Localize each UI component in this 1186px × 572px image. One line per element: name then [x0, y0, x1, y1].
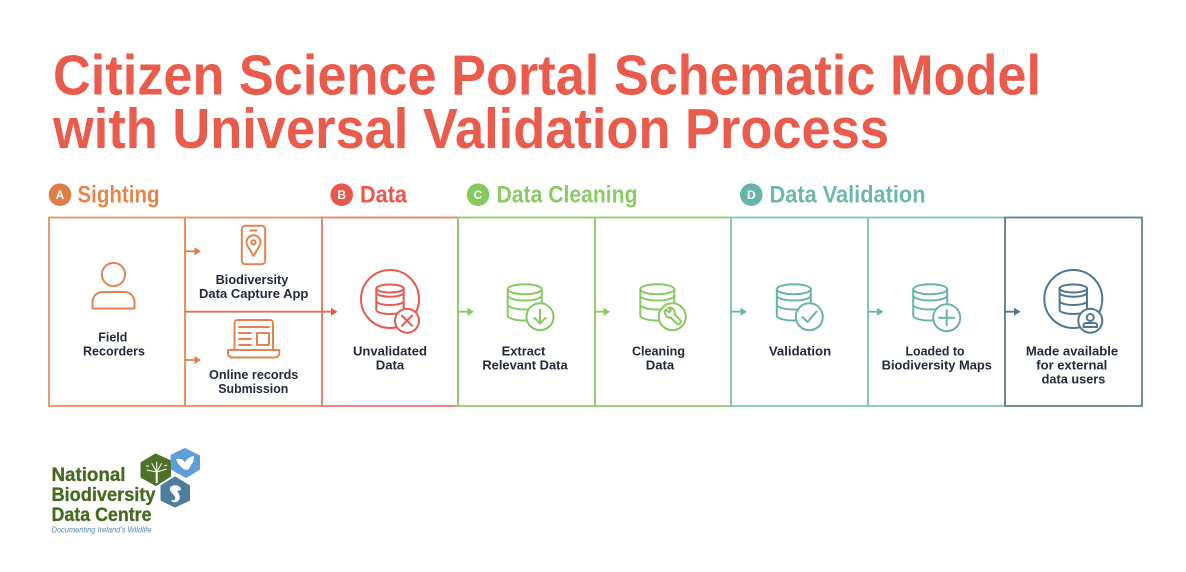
panel: capture routes — [185, 218, 322, 406]
icon: database with check — [777, 284, 823, 330]
panel: cleaning data — [595, 218, 731, 406]
panel: loaded to biodiversity maps — [868, 218, 1005, 406]
logo: National Biodiversity Data Centre — [52, 449, 199, 535]
heading: B Data: B — [337, 188, 346, 202]
logo text: Biodiversity — [52, 484, 156, 506]
text: made available for external data users: Made available — [1026, 344, 1118, 359]
icon: database with cross — [361, 270, 419, 333]
text: online records submission — [209, 367, 298, 396]
heading: B Data: Data — [360, 182, 408, 208]
panel: field recorders — [49, 218, 185, 406]
text: made available for external data users: for external — [1036, 358, 1107, 373]
icon: person — [92, 263, 134, 308]
text: made available for external data users — [1026, 344, 1118, 387]
arrow: to cleaning — [595, 308, 610, 316]
text: unvalidated data: Unvalidated — [353, 344, 427, 359]
text: cleaning data: Data — [646, 358, 675, 373]
text: loaded to biodiversity maps — [882, 344, 992, 373]
icon: database with plus — [913, 284, 960, 331]
arrow: to extract — [458, 308, 474, 316]
text: field recorders: Field — [98, 330, 127, 345]
text: loaded to biodiversity maps: Biodiversity Maps — [882, 358, 992, 373]
heading: A Sighting: A — [56, 188, 65, 202]
arrow: to loaded — [868, 308, 884, 316]
title: Citizen Science Portal Schematic Model — [53, 44, 1041, 108]
text: biodiversity data capture app: Data Capture App — [199, 286, 308, 301]
heading: D Data Validation: D — [747, 188, 756, 202]
logo text: Data Centre — [52, 504, 152, 526]
arrow: recorders to data — [185, 308, 338, 316]
text: field recorders: Recorders — [83, 344, 145, 359]
icon: database with wrench — [640, 284, 686, 330]
heading: A Sighting: Sighting — [78, 182, 160, 208]
heading: D Data Validation: Data Validation — [770, 182, 926, 208]
heading: C Data Cleaning: C — [474, 188, 483, 202]
panel: validation — [731, 218, 868, 406]
text: biodiversity data capture app: Biodiversity — [216, 272, 289, 287]
title: with Universal Validation Process — [52, 97, 889, 161]
text: extract relevant data: Extract — [502, 344, 546, 359]
text: unvalidated data: Data — [376, 358, 405, 373]
arrow: to capture app — [185, 247, 201, 255]
heading: C Data Cleaning: Data Cleaning — [496, 182, 638, 208]
logo text: National — [52, 464, 126, 486]
panel: extract relevant data — [458, 218, 595, 406]
text: extract relevant data — [482, 344, 568, 373]
text: field recorders — [83, 330, 145, 359]
text: made available for external data users: data users — [1042, 372, 1105, 387]
heading: B Data — [330, 182, 408, 208]
arrow: to made available — [1005, 308, 1020, 316]
icon: phone with pin — [242, 226, 265, 264]
arrow: to online records — [185, 356, 201, 364]
text: unvalidated data — [353, 344, 427, 373]
icon: database with down arrow — [508, 284, 554, 330]
text: cleaning data — [632, 344, 685, 373]
icon: database with user — [1044, 270, 1102, 333]
text: loaded to biodiversity maps: Loaded to — [906, 344, 965, 359]
text: validation: Validation — [769, 344, 831, 359]
panel: unvalidated data — [322, 218, 458, 406]
logo mark: three hexagons — [142, 449, 199, 506]
logo text — [52, 464, 156, 526]
panel: made available — [1005, 218, 1142, 406]
heading: A Sighting — [49, 182, 160, 208]
text: cleaning data: Cleaning — [632, 344, 685, 359]
text: online records submission: Online records — [209, 367, 298, 382]
arrow: to validation — [731, 308, 747, 316]
title — [52, 44, 1041, 161]
text: online records submission: Submission — [218, 381, 288, 396]
text: extract relevant data: Relevant Data — [482, 358, 568, 373]
text: biodiversity data capture app — [199, 272, 308, 301]
logo tagline: Documenting Ireland's Wildlife — [52, 526, 152, 535]
icon: laptop with page — [228, 320, 279, 358]
